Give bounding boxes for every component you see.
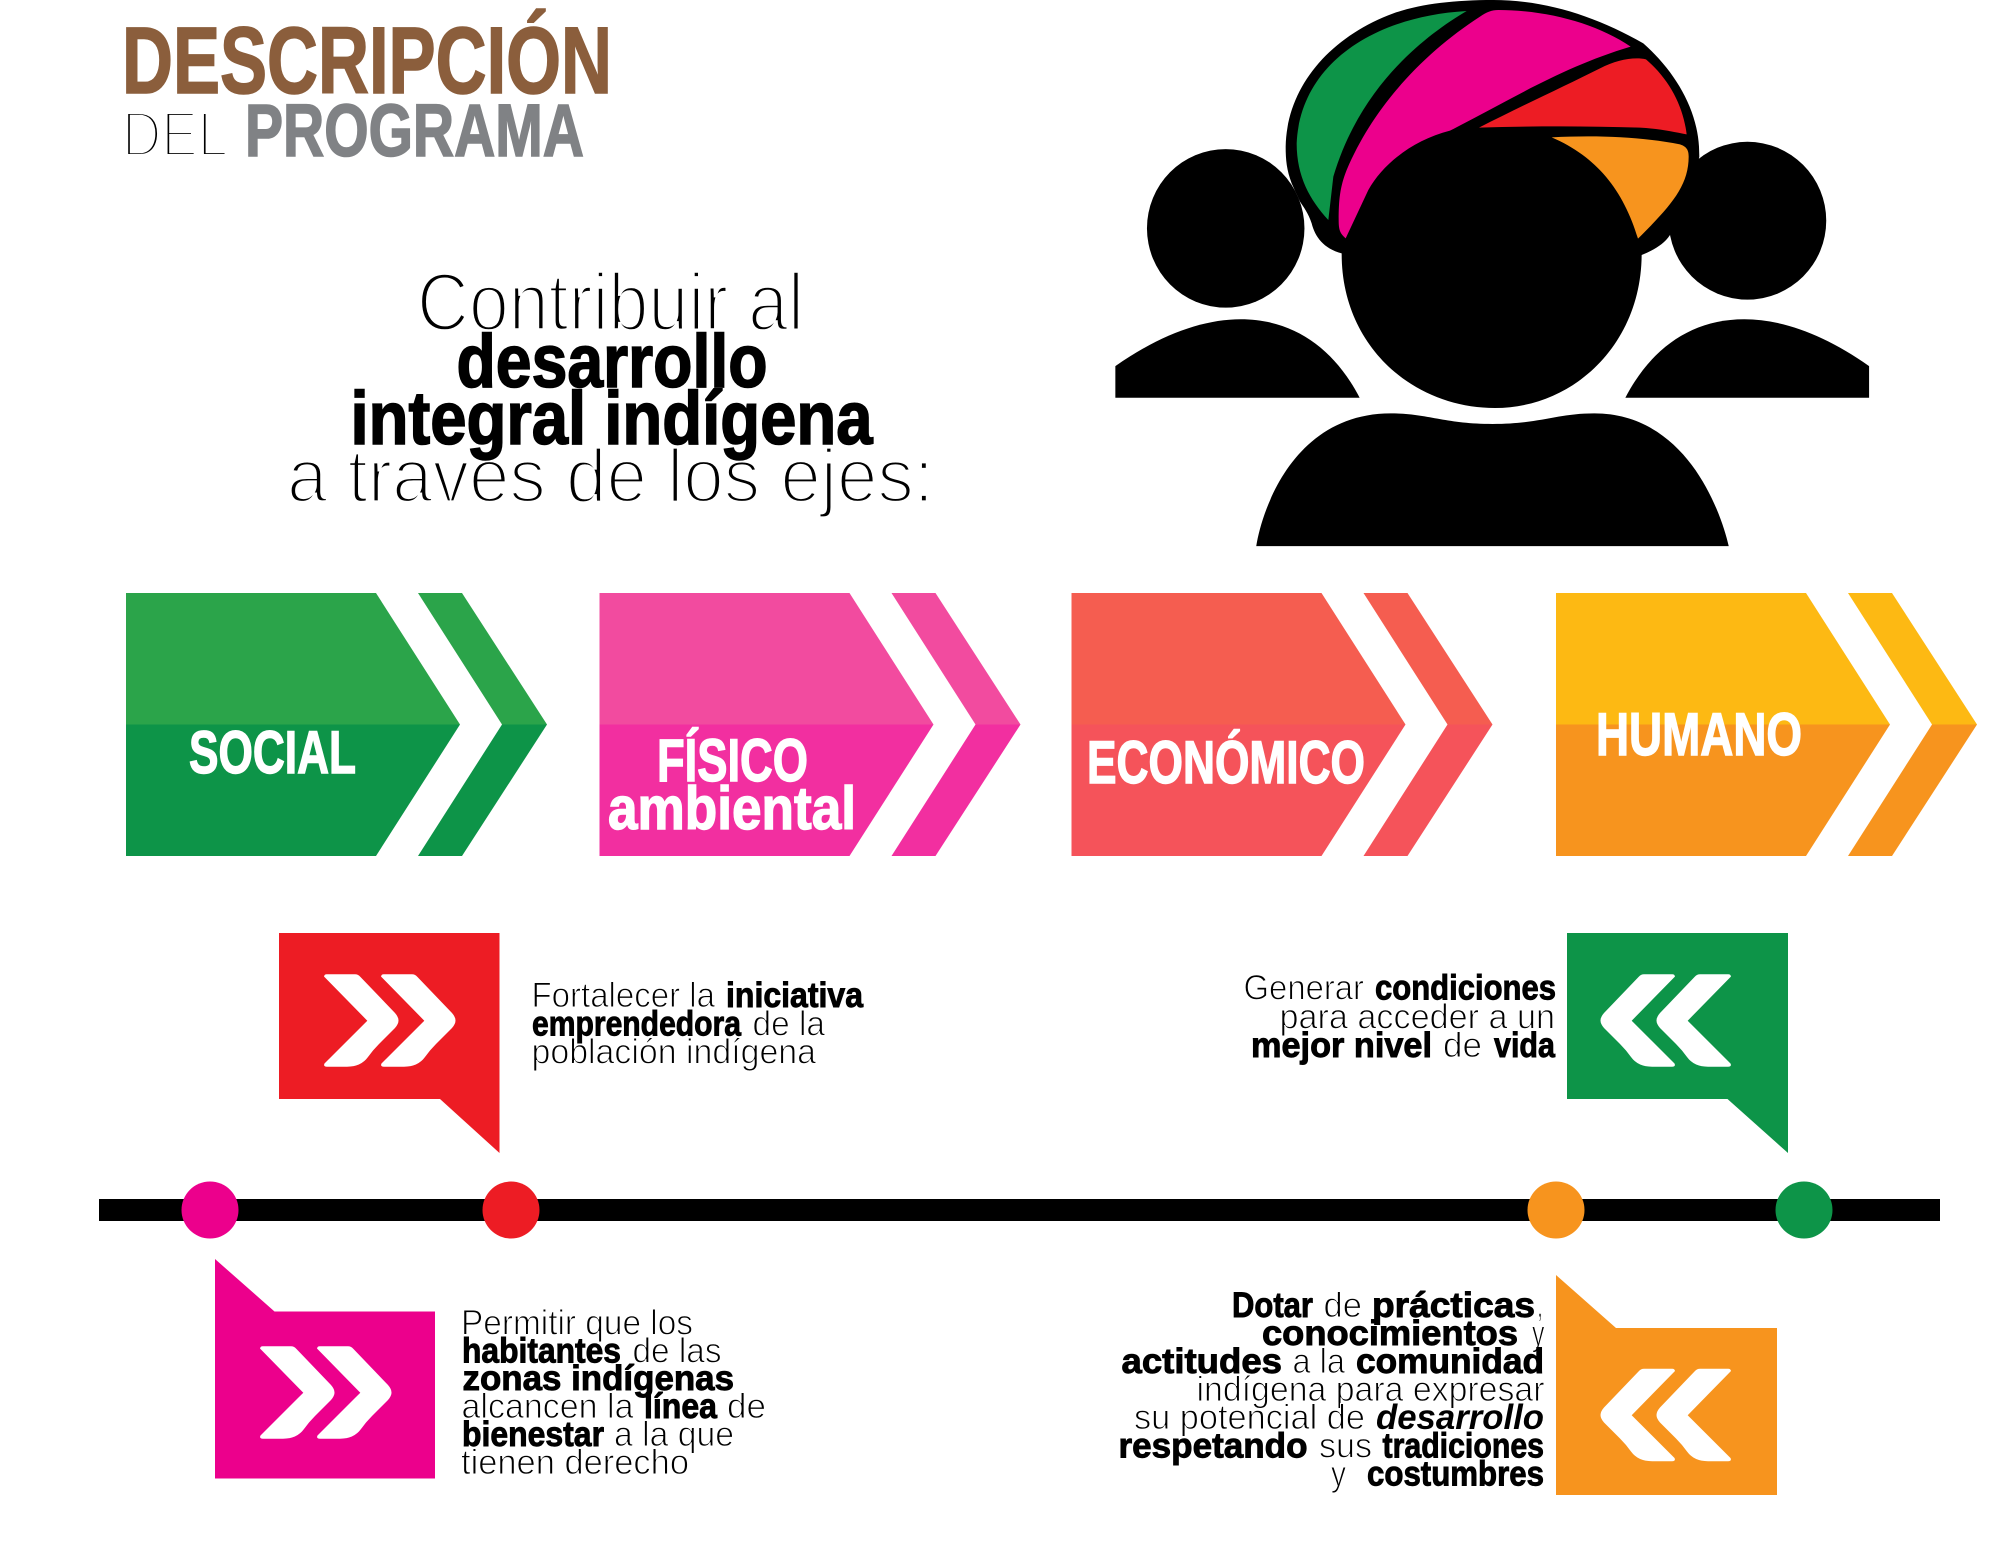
callout: green speech bubble <box>1567 933 1788 1153</box>
timeline dot: green <box>1776 1182 1832 1238</box>
timeline bar <box>99 1199 1940 1221</box>
text: dotar de prácticas: indígena para expresar <box>1196 1370 1545 1409</box>
intro line: a través de los ejes: a través de los ejes: <box>287 434 934 519</box>
text: generar condiciones <box>1244 968 1556 1065</box>
callout: red speech bubble <box>279 933 500 1153</box>
icon: left person body <box>1115 319 1360 398</box>
intro line: integral indígena: integral indígena <box>350 376 874 460</box>
text: permitir que los habitantes: a la que <box>614 1415 734 1454</box>
arrow label: humano: HUMANO <box>1596 701 1802 768</box>
text: fortalecer la iniciativa: emprendedora <box>532 1004 741 1044</box>
text: permitir que los habitantes: alcancen la <box>462 1387 634 1426</box>
text: permitir que los habitantes: de las <box>632 1332 722 1370</box>
arrow label: económico: ECONÓMICO <box>1087 729 1365 796</box>
text: dotar de prácticas <box>1118 1286 1545 1494</box>
text: fortalecer la iniciativa: Fortalecer la <box>532 976 715 1015</box>
icon: turban green band <box>1297 11 1467 220</box>
timeline dot: orange <box>1528 1182 1584 1238</box>
text: dotar de prácticas: , <box>1537 1286 1543 1325</box>
arrow: económico <box>1072 593 1492 856</box>
intro line: contribuir al: Contribuir al <box>417 257 804 348</box>
text: dotar de prácticas: actitudes <box>1122 1342 1282 1381</box>
icon: turban pink band <box>1339 10 1631 238</box>
text: permitir que los habitantes: bienestar <box>462 1415 604 1454</box>
timeline dot: red <box>482 1182 540 1238</box>
text: dotar de prácticas: sus <box>1319 1426 1372 1466</box>
text: permitir que los habitantes: habitantes <box>462 1332 621 1370</box>
intro line: desarrollo: desarrollo <box>456 319 768 403</box>
icon: center head and turban outline <box>1286 0 1699 408</box>
heading: programa: PROGRAMA <box>245 89 584 172</box>
icon: right person head <box>1669 142 1826 300</box>
text: dotar de prácticas: costumbres <box>1367 1454 1544 1494</box>
text: dotar de prácticas: conocimientos <box>1262 1314 1518 1353</box>
text: dotar de prácticas: Dotar <box>1232 1286 1313 1325</box>
callout: orange speech bubble <box>1556 1275 1777 1495</box>
text: dotar de prácticas: comunidad <box>1356 1342 1544 1381</box>
text: dotar de prácticas: tradiciones <box>1382 1426 1544 1466</box>
arrow: humano <box>1556 593 1977 856</box>
heading: del: DEL <box>122 98 228 170</box>
text: permitir que los habitantes <box>461 1304 766 1482</box>
text: permitir que los habitantes: de <box>727 1387 766 1426</box>
text: dotar de prácticas: respetando <box>1118 1426 1308 1466</box>
text: generar condiciones: Generar <box>1244 968 1364 1008</box>
text: generar condiciones: para acceder a un <box>1280 998 1555 1036</box>
text: dotar de prácticas: y <box>1532 1314 1545 1353</box>
arrow label: físico ambiental: ambiental <box>608 775 856 842</box>
text: permitir que los habitantes: tienen derecho <box>461 1443 689 1482</box>
text: dotar de prácticas: y <box>1331 1454 1346 1494</box>
arrow label: físico ambiental: FÍSICO <box>657 727 808 794</box>
icon: turban red band <box>1479 58 1687 134</box>
text: generar condiciones: mejor nivel <box>1251 1026 1432 1065</box>
heading: descripción: DESCRIPCIÓN <box>122 8 612 114</box>
icon: three people with turban <box>1115 0 1869 546</box>
icon: double chevron left <box>1600 1369 1731 1461</box>
icon: right person body <box>1625 319 1869 398</box>
timeline <box>99 1182 1940 1238</box>
text: permitir que los habitantes: zonas indígenas <box>462 1359 734 1398</box>
icon: double chevron right <box>260 1346 392 1439</box>
text: generar condiciones: condiciones <box>1375 968 1556 1008</box>
text: fortalecer la iniciativa: población indígena <box>532 1032 817 1072</box>
text: generar condiciones: vida <box>1494 1026 1555 1065</box>
text: dotar de prácticas: a la <box>1292 1342 1345 1381</box>
arrow: social <box>126 593 547 856</box>
text: fortalecer la iniciativa: de la <box>752 1004 826 1044</box>
title <box>122 8 612 172</box>
intro statement <box>287 257 934 519</box>
text: dotar de prácticas: desarrollo <box>1376 1398 1544 1437</box>
text: fortalecer la iniciativa <box>532 976 863 1072</box>
icon: turban orange band <box>1552 136 1689 239</box>
text: fortalecer la iniciativa: iniciativa <box>726 976 863 1015</box>
timeline dot: pink <box>182 1182 238 1238</box>
icon: center person body <box>1256 413 1729 546</box>
text: dotar de prácticas: prácticas <box>1372 1286 1535 1325</box>
callout: pink speech bubble <box>215 1259 435 1478</box>
arrow label: físico ambiental <box>608 727 856 842</box>
icon: left person head <box>1147 149 1304 308</box>
text: permitir que los habitantes: línea <box>644 1387 717 1426</box>
text: dotar de prácticas: de <box>1324 1286 1362 1325</box>
arrow: físico ambiental <box>600 593 1020 856</box>
text: generar condiciones: de <box>1443 1026 1482 1065</box>
text: permitir que los habitantes: Permitir que los <box>461 1304 693 1342</box>
icon: double chevron right <box>324 974 456 1067</box>
text: dotar de prácticas: su potencial de <box>1134 1398 1365 1437</box>
arrow label: social: SOCIAL <box>189 719 356 786</box>
icon: double chevron left <box>1600 974 1731 1067</box>
